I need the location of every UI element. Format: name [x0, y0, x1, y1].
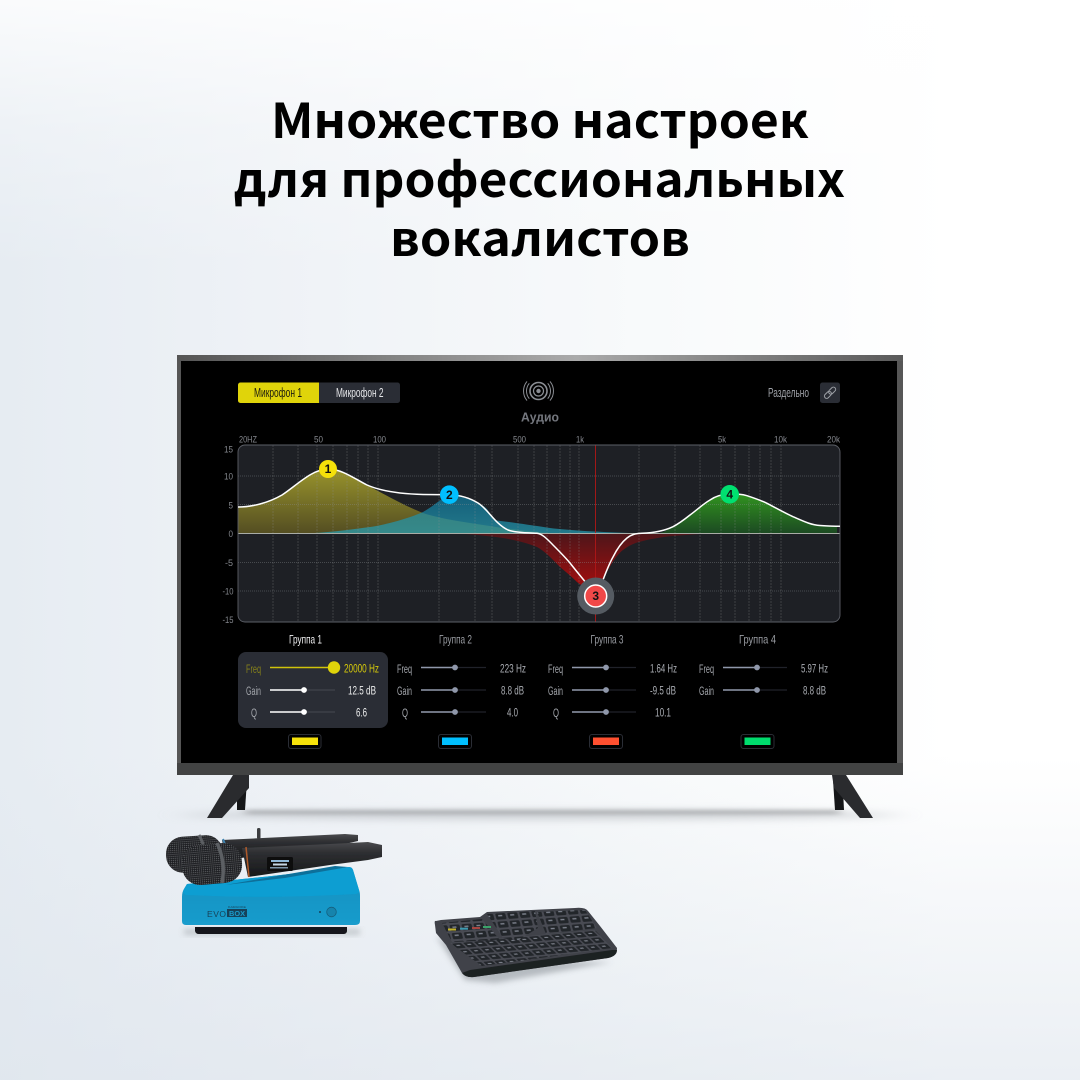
group headings: Группа 2 [439, 632, 472, 646]
panel: group 1: Q [251, 708, 257, 720]
group headings: Группа 3 [590, 632, 624, 646]
blue band fill [310, 495, 637, 533]
icon: audio speaker [524, 381, 553, 401]
microphone tabs: Микрофон 1 [254, 386, 302, 400]
box power button [319, 907, 336, 917]
panel: group 2 [397, 664, 526, 720]
box logo: BOX [229, 909, 245, 918]
tv stand right leg [832, 775, 873, 818]
panel: group 4: Gain [699, 686, 714, 698]
marker 3: 3 [592, 589, 599, 603]
gain axis labels [222, 444, 234, 626]
group headings: Группа 1 [289, 632, 322, 646]
panel: group 4 [699, 664, 828, 698]
panel: group 2: 223 Hz [500, 664, 526, 676]
frequency axis labels: 10k [774, 434, 787, 446]
panel: group 1: 12.5 dB [348, 686, 376, 698]
zero line [238, 533, 840, 534]
panel: group 2: 8.8 dB [501, 686, 524, 698]
microphone tabs: Микрофон 2 [336, 386, 384, 400]
panel: group 1: Freq [246, 664, 261, 676]
title: вокалистов [390, 200, 690, 270]
panel: group 3: 10.1 [655, 708, 671, 720]
karaoke box with microphones [165, 828, 382, 935]
box logo: KARAOKE [228, 905, 246, 909]
frequency axis labels: 50 [314, 434, 323, 446]
gain axis labels: -15 [222, 615, 234, 626]
box shadow [184, 929, 360, 935]
panel: group 3: 1.64 Hz [650, 664, 677, 676]
gain axis labels: -10 [222, 586, 234, 598]
marker 1 [319, 460, 337, 478]
selected frequency marker line [595, 446, 596, 622]
panel: group 3 [548, 664, 677, 720]
group headings: Группа 4 [739, 632, 776, 646]
separate label: Раздельно [768, 386, 809, 400]
gain axis labels: -5 [225, 558, 233, 569]
remote body [435, 908, 617, 977]
marker 4 [720, 485, 739, 504]
equalizer chart [238, 445, 840, 622]
panel: group 3: Q [553, 708, 559, 720]
panel: group 3: -9.5 dB [650, 686, 676, 698]
marker 1: 1 [325, 462, 332, 476]
tv stand left leg [207, 775, 249, 818]
colour swatches [288, 734, 774, 748]
frequency axis labels: 100 [373, 434, 386, 446]
panel: group 1 [238, 652, 388, 728]
panel: group 4: Freq [699, 664, 714, 676]
microphone tabs [238, 382, 400, 403]
gain axis labels: 10 [224, 472, 233, 482]
panel: group 1: 6.6 [356, 708, 367, 720]
panel: group 2: Gain [397, 686, 412, 698]
frequency axis labels: 500 [513, 434, 526, 446]
panel: group 4: 5.97 Hz [801, 664, 828, 676]
green band fill [660, 494, 837, 533]
marker 3 [577, 578, 614, 614]
panel: group 1: Gain [246, 686, 261, 698]
remote control [435, 908, 617, 983]
box body [182, 867, 360, 925]
response curve [238, 469, 840, 596]
remote shadow [436, 936, 612, 983]
panel: group 2: Freq [397, 664, 412, 676]
title [234, 82, 845, 270]
icon: link button [820, 382, 840, 403]
screen heading: Аудио [521, 410, 559, 424]
television [177, 355, 903, 775]
gain axis labels: 15 [224, 444, 233, 456]
gain axis labels: 0 [228, 529, 233, 540]
frequency axis labels: 20HZ [239, 434, 257, 446]
gain axis labels: 5 [228, 500, 233, 512]
panel: group 2: Q [402, 708, 408, 720]
panel: group 4: 8.8 dB [803, 686, 826, 698]
frequency axis labels [239, 434, 840, 446]
frequency axis labels: 1k [576, 434, 584, 446]
floor shadow [180, 810, 900, 820]
panel: group 3: Gain [548, 686, 563, 698]
title: для профессиональных [234, 141, 845, 211]
box base [195, 927, 347, 934]
frequency axis labels: 20k [827, 434, 840, 446]
panel: group 3: Freq [548, 664, 563, 676]
marker 2: 2 [446, 488, 453, 502]
frequency axis labels: 5k [718, 434, 726, 446]
rear microphone [165, 828, 358, 874]
upper keys [442, 919, 500, 942]
microphone display [267, 857, 293, 871]
box logo [207, 905, 247, 919]
marker 2 [440, 485, 459, 504]
grid lines [238, 445, 840, 622]
panel: group 2: 4.0 [507, 708, 518, 720]
red band fill [467, 534, 698, 585]
group headings [289, 632, 776, 646]
front microphone [180, 841, 382, 887]
panel: group 1: 20000 Hz [344, 664, 379, 676]
yellow band fill [238, 469, 555, 533]
title: Множество настроек [271, 82, 809, 152]
keyboard keys [450, 930, 612, 966]
remote colour buttons [448, 926, 491, 930]
marker 4: 4 [726, 488, 733, 502]
box logo: EVO [207, 909, 226, 919]
tv screen [181, 361, 897, 763]
